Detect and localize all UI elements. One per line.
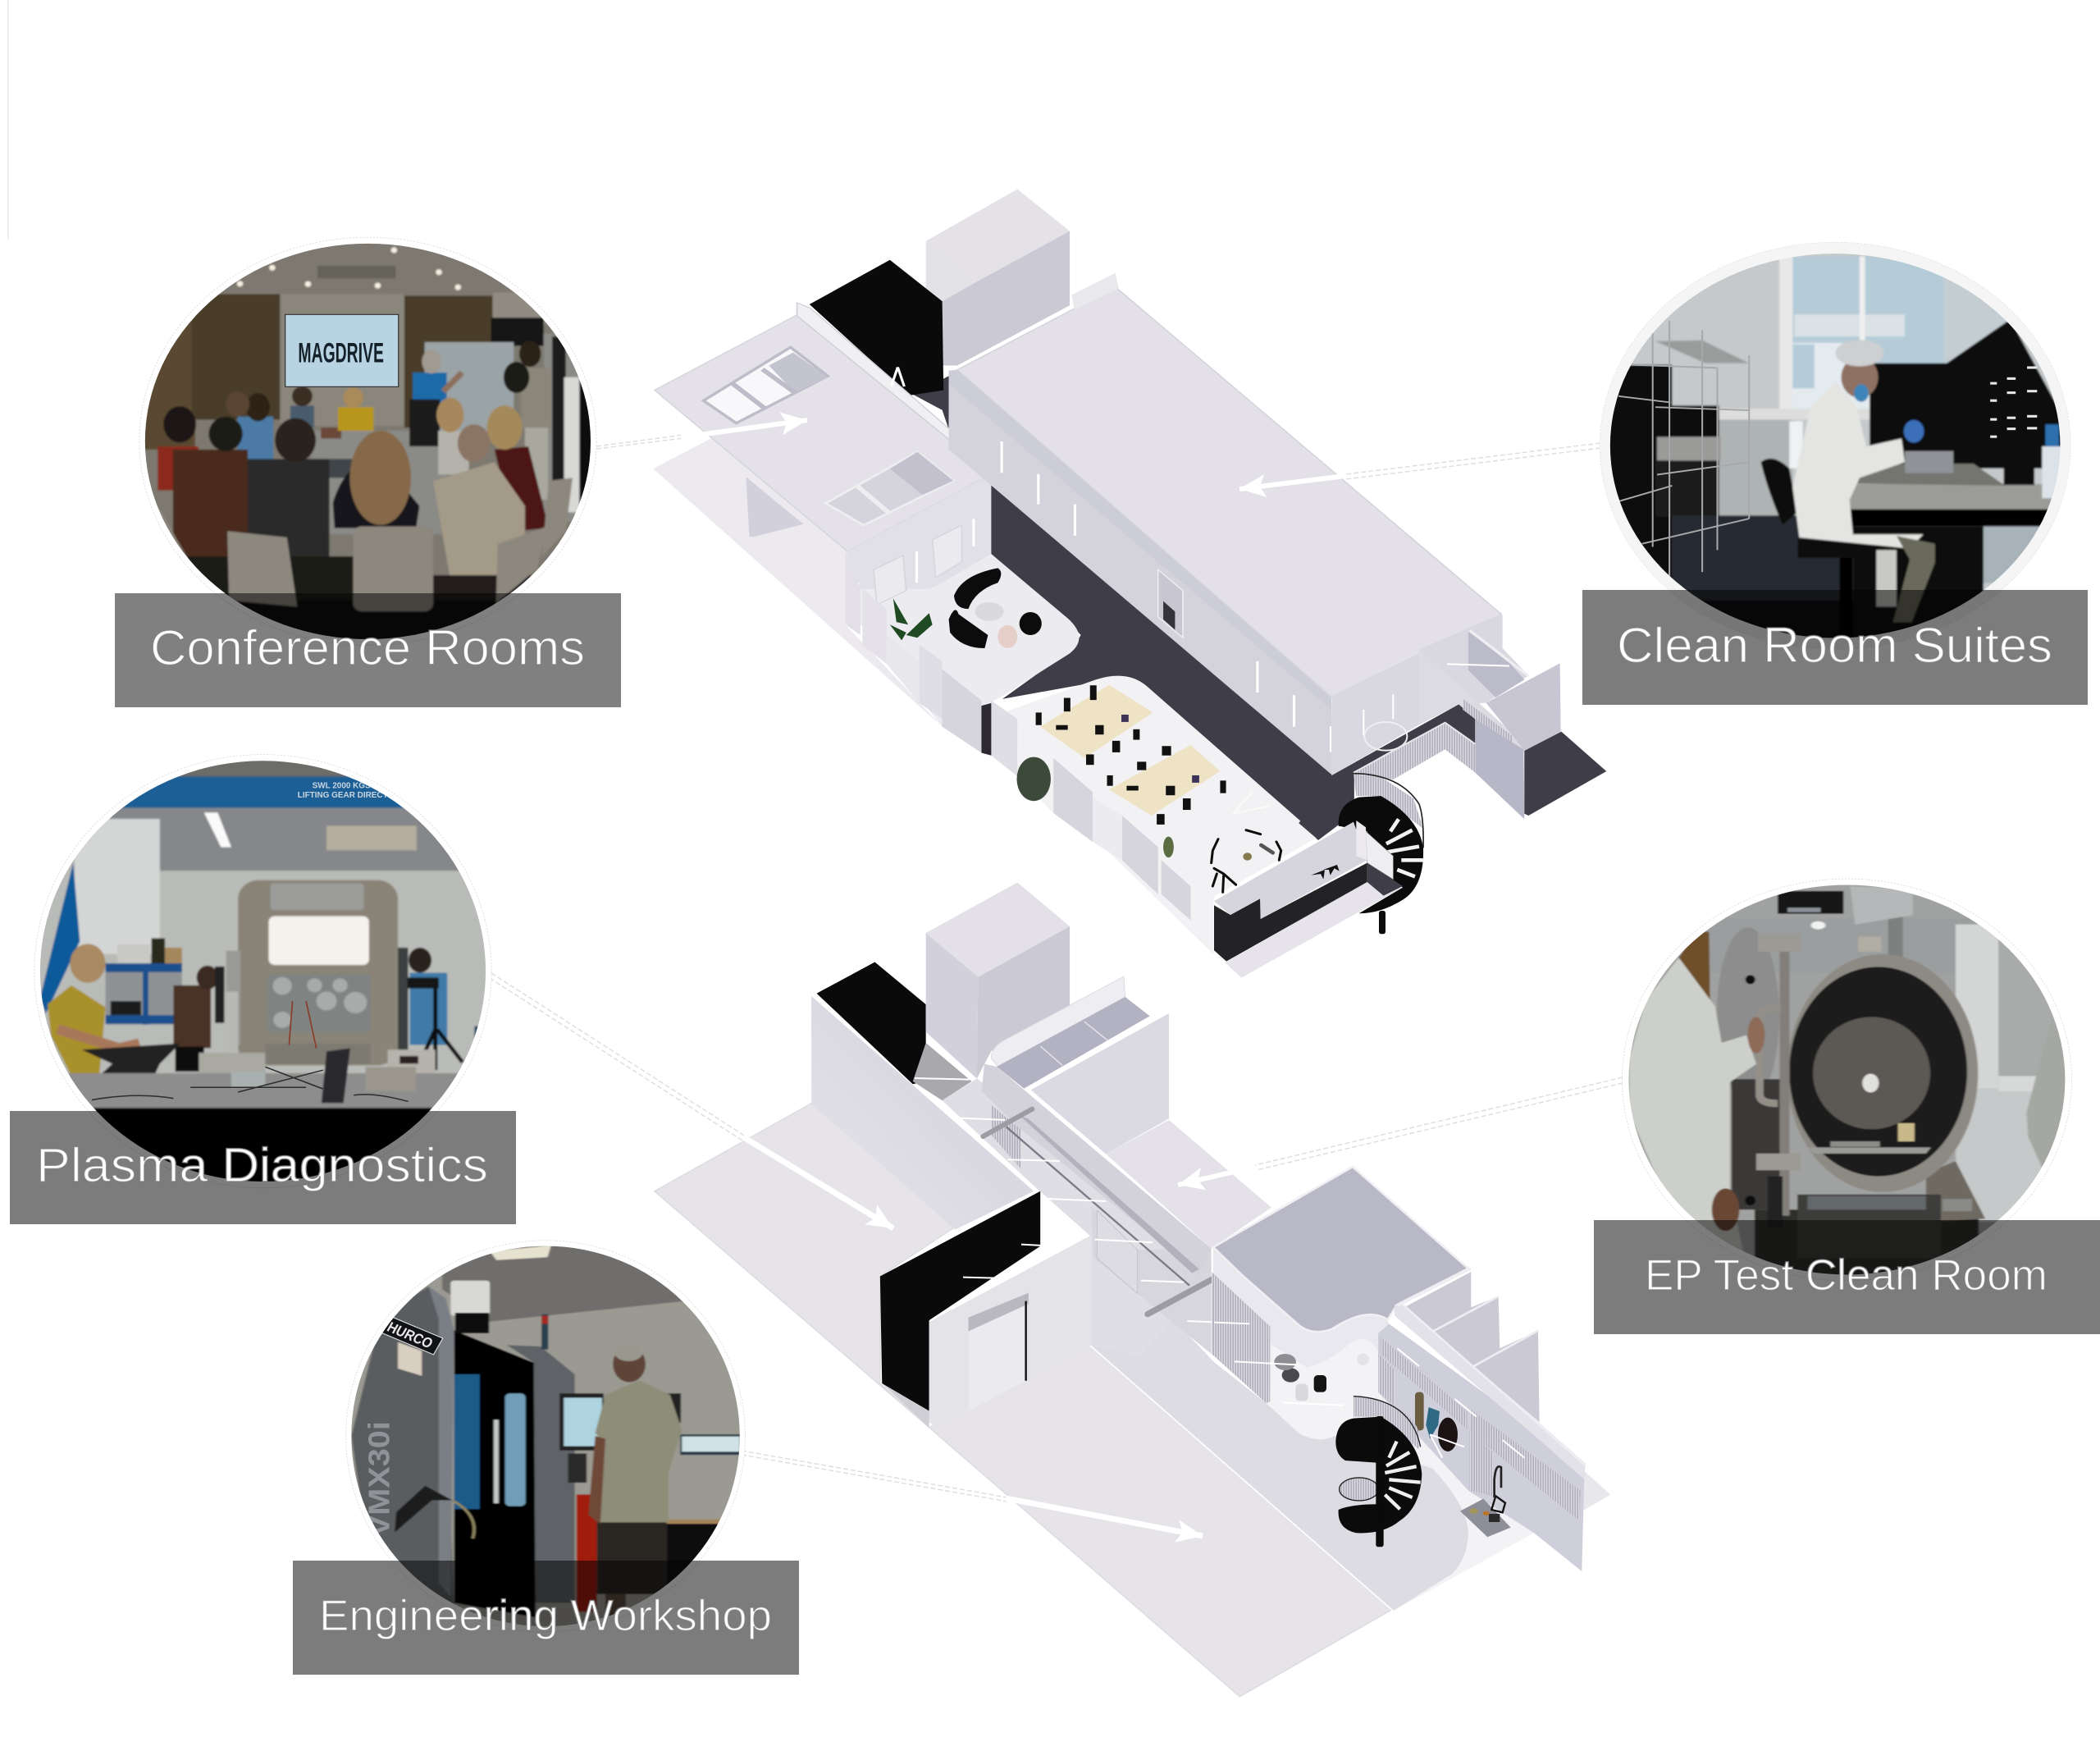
clean room side wall (949, 370, 1333, 775)
conference and clean room wing (653, 190, 1501, 954)
speckled floor (1089, 1231, 1468, 1611)
clean room end wall (1331, 614, 1503, 775)
connector: conference rooms (596, 420, 807, 449)
test room floor (1213, 1167, 1468, 1332)
pipes (983, 1109, 1224, 1314)
lounge furniture (949, 568, 1042, 648)
black plant room (810, 260, 943, 395)
label: plasma diagnostics: Plasma Diagnostics (36, 1139, 488, 1192)
photo: EP test clean room (1622, 879, 2071, 1282)
lounge floor (861, 554, 1079, 727)
machine model text: VMX30i (364, 1421, 396, 1537)
arrow: engineering workshop (1006, 1498, 1203, 1536)
lounge back wall (846, 474, 991, 624)
arrow: plasma diagnostics (745, 1138, 893, 1228)
photo: plasma diagnostics (34, 755, 493, 1188)
racking (1618, 321, 1749, 578)
label bar: conference rooms (115, 593, 621, 707)
pegboard holes (1990, 366, 2037, 438)
stair landing railing (1366, 831, 1393, 880)
floor ticks (1233, 792, 1269, 814)
stair hall and test room (1212, 1167, 1586, 1571)
partition (1419, 650, 1524, 752)
lower skylights (826, 452, 953, 525)
cupboard divider lines (1397, 1269, 1585, 1465)
mesh under gallery (991, 1105, 1021, 1169)
left mesh wall (1212, 1272, 1270, 1403)
kitchen worktop (1214, 822, 1367, 919)
label bar: clean room suites (1582, 590, 2088, 705)
glazed gallery wall (982, 1064, 1212, 1274)
desk two (1109, 745, 1220, 816)
wall light ticks (858, 367, 1294, 727)
cupboard walls (1404, 1272, 1540, 1422)
kitchen backing (1367, 863, 1403, 896)
photo: engineering workshop (346, 1241, 748, 1632)
front wall (1475, 720, 1524, 819)
curved balustrade (1213, 1247, 1389, 1368)
stair hall floors (1089, 1231, 1610, 1611)
label bar: plasma diagnostics (10, 1111, 516, 1224)
white ticks (1214, 1323, 1524, 1458)
upper skylights (704, 347, 828, 423)
wall light ticks (915, 1078, 1250, 1323)
upper floor plan (653, 190, 1606, 978)
ladder (1007, 1127, 1189, 1286)
floor panels along outer wall (846, 551, 1191, 921)
long mesh band (1470, 1409, 1581, 1520)
machine brand plate (378, 1315, 443, 1355)
spiral stair (1335, 1416, 1422, 1547)
tall service block (926, 190, 1070, 366)
photo: conference rooms (139, 236, 597, 646)
office chairs and monitors (1036, 685, 1226, 825)
desk one (1040, 685, 1153, 758)
railing (797, 303, 991, 474)
label bar: engineering workshop (293, 1561, 799, 1675)
connector: plasma diagnostics (490, 973, 893, 1228)
table plant (1243, 853, 1252, 861)
conference lower slab (653, 437, 943, 727)
end room (1419, 614, 1528, 704)
dark corridor floor (913, 376, 1354, 840)
right wall (1486, 663, 1561, 751)
storage mullions (1040, 1022, 1108, 1065)
entrance grille (1354, 722, 1475, 779)
mezzanine strip (1106, 1120, 1271, 1249)
label bar: EP test clean room (1594, 1220, 2100, 1334)
glass balustrade (991, 976, 1125, 1067)
speckled floor at door wall (882, 1383, 929, 1428)
black back wall (817, 962, 926, 1084)
parapet (1071, 273, 1119, 309)
central light floor (943, 1078, 1213, 1356)
label: EP test clean room: EP Test Clean Room (1645, 1251, 2048, 1300)
arrow: conference rooms (681, 420, 807, 437)
sink and taps (1311, 865, 1340, 880)
tall end panel (1356, 821, 1367, 860)
clean room end and kitchen (1212, 614, 1606, 978)
spiral stair (1339, 796, 1423, 934)
far slab corner (1569, 1471, 1610, 1515)
dark floor return (1299, 704, 1475, 839)
arrow: clean room suites (1239, 476, 1345, 489)
tall service block (926, 882, 1070, 1078)
lower floor plan (655, 882, 1610, 1697)
workshop slab (655, 1104, 1394, 1697)
connector: EP test clean room (1178, 1077, 1623, 1185)
upper wall mesh (1381, 1337, 1467, 1429)
coat rack (1415, 1392, 1458, 1451)
gallery shadow band (1020, 1116, 1199, 1273)
clean room roof (957, 287, 1501, 697)
conference roof (655, 315, 991, 551)
slab opening (746, 477, 804, 537)
side table (1460, 1466, 1511, 1537)
photo: clean room suites (1600, 242, 2070, 649)
kitchen floor (1225, 882, 1403, 978)
office floor (1007, 676, 1318, 954)
roller door (968, 1293, 1029, 1411)
partition mesh (1463, 699, 1512, 747)
door wall (929, 1235, 1091, 1428)
wall below gallery (1091, 1206, 1212, 1354)
brand text: HURCO (385, 1319, 436, 1351)
speckled floor patch (913, 1043, 971, 1100)
arrow: EP test clean room (1178, 1167, 1255, 1185)
light ticks on end wall (1258, 663, 1420, 752)
crane beam subtitle: LIFTING GEAR DIRECT (298, 791, 388, 800)
spiral stair railing (1354, 774, 1423, 848)
screen (285, 314, 399, 386)
label: clean room suites: Clean Room Suites (1617, 618, 2052, 673)
central gallery (915, 976, 1271, 1354)
plant by lounge (890, 598, 933, 640)
label: engineering workshop: Engineering Workshop (319, 1592, 772, 1640)
connector: clean room suites (1239, 443, 1600, 489)
diagnostics wall (811, 996, 1034, 1230)
label: conference rooms: Conference Rooms (150, 620, 585, 675)
workshop edge (1089, 1345, 1393, 1611)
door (1158, 569, 1183, 638)
tall mesh panel (1470, 1430, 1493, 1496)
cabling (92, 1001, 409, 1101)
connector: engineering workshop (742, 1451, 1203, 1536)
table chairs (1212, 830, 1281, 892)
crane beam text: SWL 2000 KGS (313, 782, 371, 791)
white floor (1266, 1332, 1534, 1611)
black front wall (880, 1191, 1040, 1411)
double door (1097, 1210, 1138, 1294)
bookshelves (874, 525, 962, 605)
small plant (1163, 837, 1174, 857)
corner mesh (1379, 1354, 1395, 1406)
plant stools (1274, 1353, 1369, 1401)
storage side wall (1031, 1013, 1169, 1154)
screen logo: MAGDRIVE (298, 337, 384, 368)
end dark floor (1524, 732, 1606, 816)
plant by office (1016, 757, 1051, 801)
ring light (1364, 722, 1407, 751)
wall top band (1395, 1303, 1586, 1479)
wing walls (811, 882, 1213, 1428)
kitchen units (1214, 863, 1367, 962)
mesh strip (949, 370, 1331, 710)
storage floor (997, 997, 1150, 1089)
spiral stair railing (1354, 1397, 1421, 1450)
long wall (1378, 1323, 1585, 1571)
